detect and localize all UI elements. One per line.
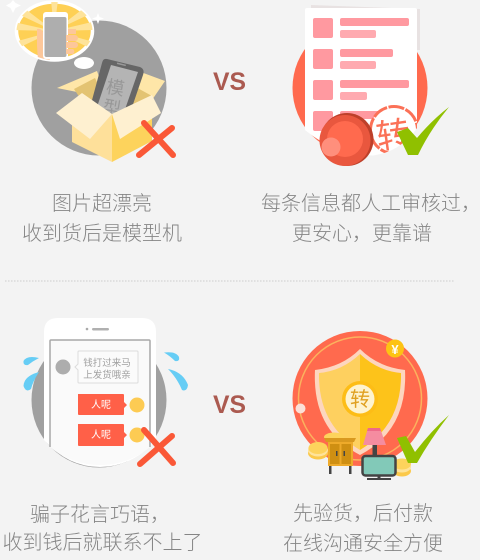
- coin yen: [386, 340, 404, 358]
- caption: top left: 收到货后是模型机: [22, 222, 182, 245]
- red circle backdrop: [292, 331, 428, 466]
- icon: red cross: [140, 430, 173, 464]
- document page: [311, 5, 420, 50]
- box front flaps: [56, 93, 112, 139]
- chat bubble gray: [75, 351, 138, 383]
- phone body: [44, 318, 156, 467]
- box back flaps: [57, 71, 112, 114]
- phone in box: 模: [105, 77, 126, 99]
- caption: bottom right: [283, 502, 443, 555]
- stamp ball: [320, 113, 374, 166]
- tv: [362, 456, 396, 480]
- chat bubble red 2: [78, 424, 127, 446]
- chat bubble red 2: 人呢: [91, 429, 111, 441]
- chat bubble gray: 上发货哦亲: [83, 369, 131, 381]
- shield: [315, 349, 405, 455]
- thought bubble: [14, 0, 94, 69]
- caption: top left: [22, 192, 182, 245]
- vs label top: VS: [213, 68, 246, 96]
- caption: bottom left: 收到钱后就联系不上了: [2, 531, 202, 554]
- avatar left: [56, 360, 70, 374]
- illustration: scam chat: [23, 318, 188, 468]
- gray circle backdrop: [32, 20, 166, 156]
- caption: top left: 图片超漂亮: [52, 192, 152, 215]
- phone in box: 型: [101, 97, 122, 119]
- sparkles: [6, 0, 104, 24]
- chat bubble gray: 钱打过来马: [83, 357, 131, 369]
- icon: green check: [397, 415, 449, 463]
- coins right: [393, 458, 411, 476]
- caption: top right: [261, 192, 480, 245]
- vs label bottom: VS: [213, 391, 246, 419]
- cabinet: [324, 438, 356, 474]
- orange ring: [298, 337, 422, 460]
- lamp: [363, 428, 386, 456]
- phone screen: [50, 340, 150, 465]
- ring dot: [296, 404, 306, 414]
- caption: bottom right: 先验货，后付款: [293, 502, 433, 525]
- listing rows: [313, 18, 409, 131]
- red circle backdrop: [292, 20, 428, 156]
- avatar right 2: [130, 428, 144, 442]
- coins left: [308, 432, 344, 460]
- caption: bottom right: 在线沟通安全方便: [283, 532, 443, 555]
- shield: 转: [350, 388, 370, 411]
- box body: [72, 114, 112, 162]
- illustration: reviewed listings: [292, 5, 449, 166]
- gray circle backdrop: [32, 332, 166, 468]
- caption: top right: 更安心，更靠谱: [292, 222, 432, 245]
- caption: bottom left: [2, 503, 202, 554]
- illustration: fake phone in a box: [6, 0, 173, 162]
- stamp mark: 转: [374, 115, 413, 157]
- phone in box: [88, 59, 144, 125]
- caption: top right: 每条信息都人工审核过，: [261, 192, 480, 215]
- icon: red cross: [139, 123, 173, 155]
- avatar right 1: [130, 398, 144, 412]
- caption: bottom left: 骗子花言巧语，: [30, 503, 170, 526]
- stamp mark: [370, 106, 418, 157]
- icon: green check: [397, 107, 449, 155]
- chat bubble red 1: 人呢: [91, 399, 111, 411]
- coin yen: ¥: [391, 342, 399, 357]
- chat bubble red 1: [78, 394, 127, 415]
- icon: tear drops: [23, 352, 188, 390]
- illustration: secure shield: [292, 331, 449, 480]
